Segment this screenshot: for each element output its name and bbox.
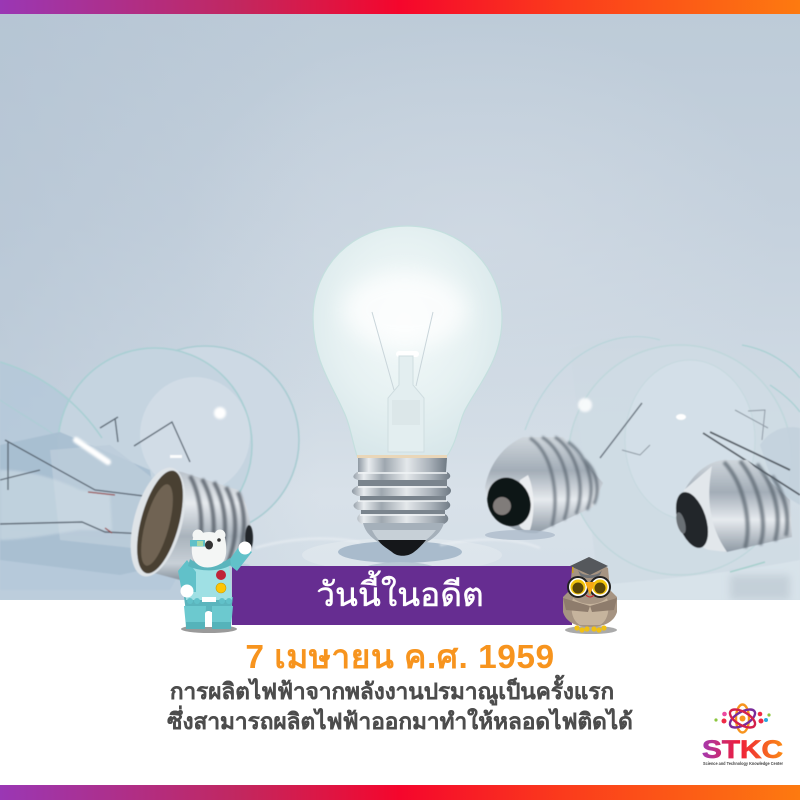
photo: glass light bulbs [0, 14, 800, 600]
top gradient bar [0, 0, 800, 14]
icon: atom [714, 704, 771, 732]
description line 1: การผลิตไฟฟ้าจากพลังงานปรมาณูเป็นครั้งแรก [170, 679, 614, 704]
tagline: Science and Technology Knowledge Center [703, 761, 783, 766]
bottom gradient bar [0, 785, 800, 800]
logo: STKC [702, 703, 783, 766]
mascot: polar bear robot [178, 530, 252, 633]
left bulbs [0, 346, 299, 600]
title: วันนี้ในอดีต [316, 577, 484, 614]
central glowing bulb [313, 226, 502, 556]
date heading: 7 เมษายน ค.ศ. 1959 [245, 639, 555, 676]
description line 2: ซึ่งสามารถผลิตไฟฟ้าออกมาทำให้หลอดไฟติดได้ [167, 709, 633, 734]
purple title banner [232, 566, 572, 625]
wordmark: STKC [702, 736, 783, 764]
right bulbs [479, 336, 800, 600]
table reflections [255, 530, 555, 582]
mascot: owl with graduation cap [563, 557, 617, 634]
